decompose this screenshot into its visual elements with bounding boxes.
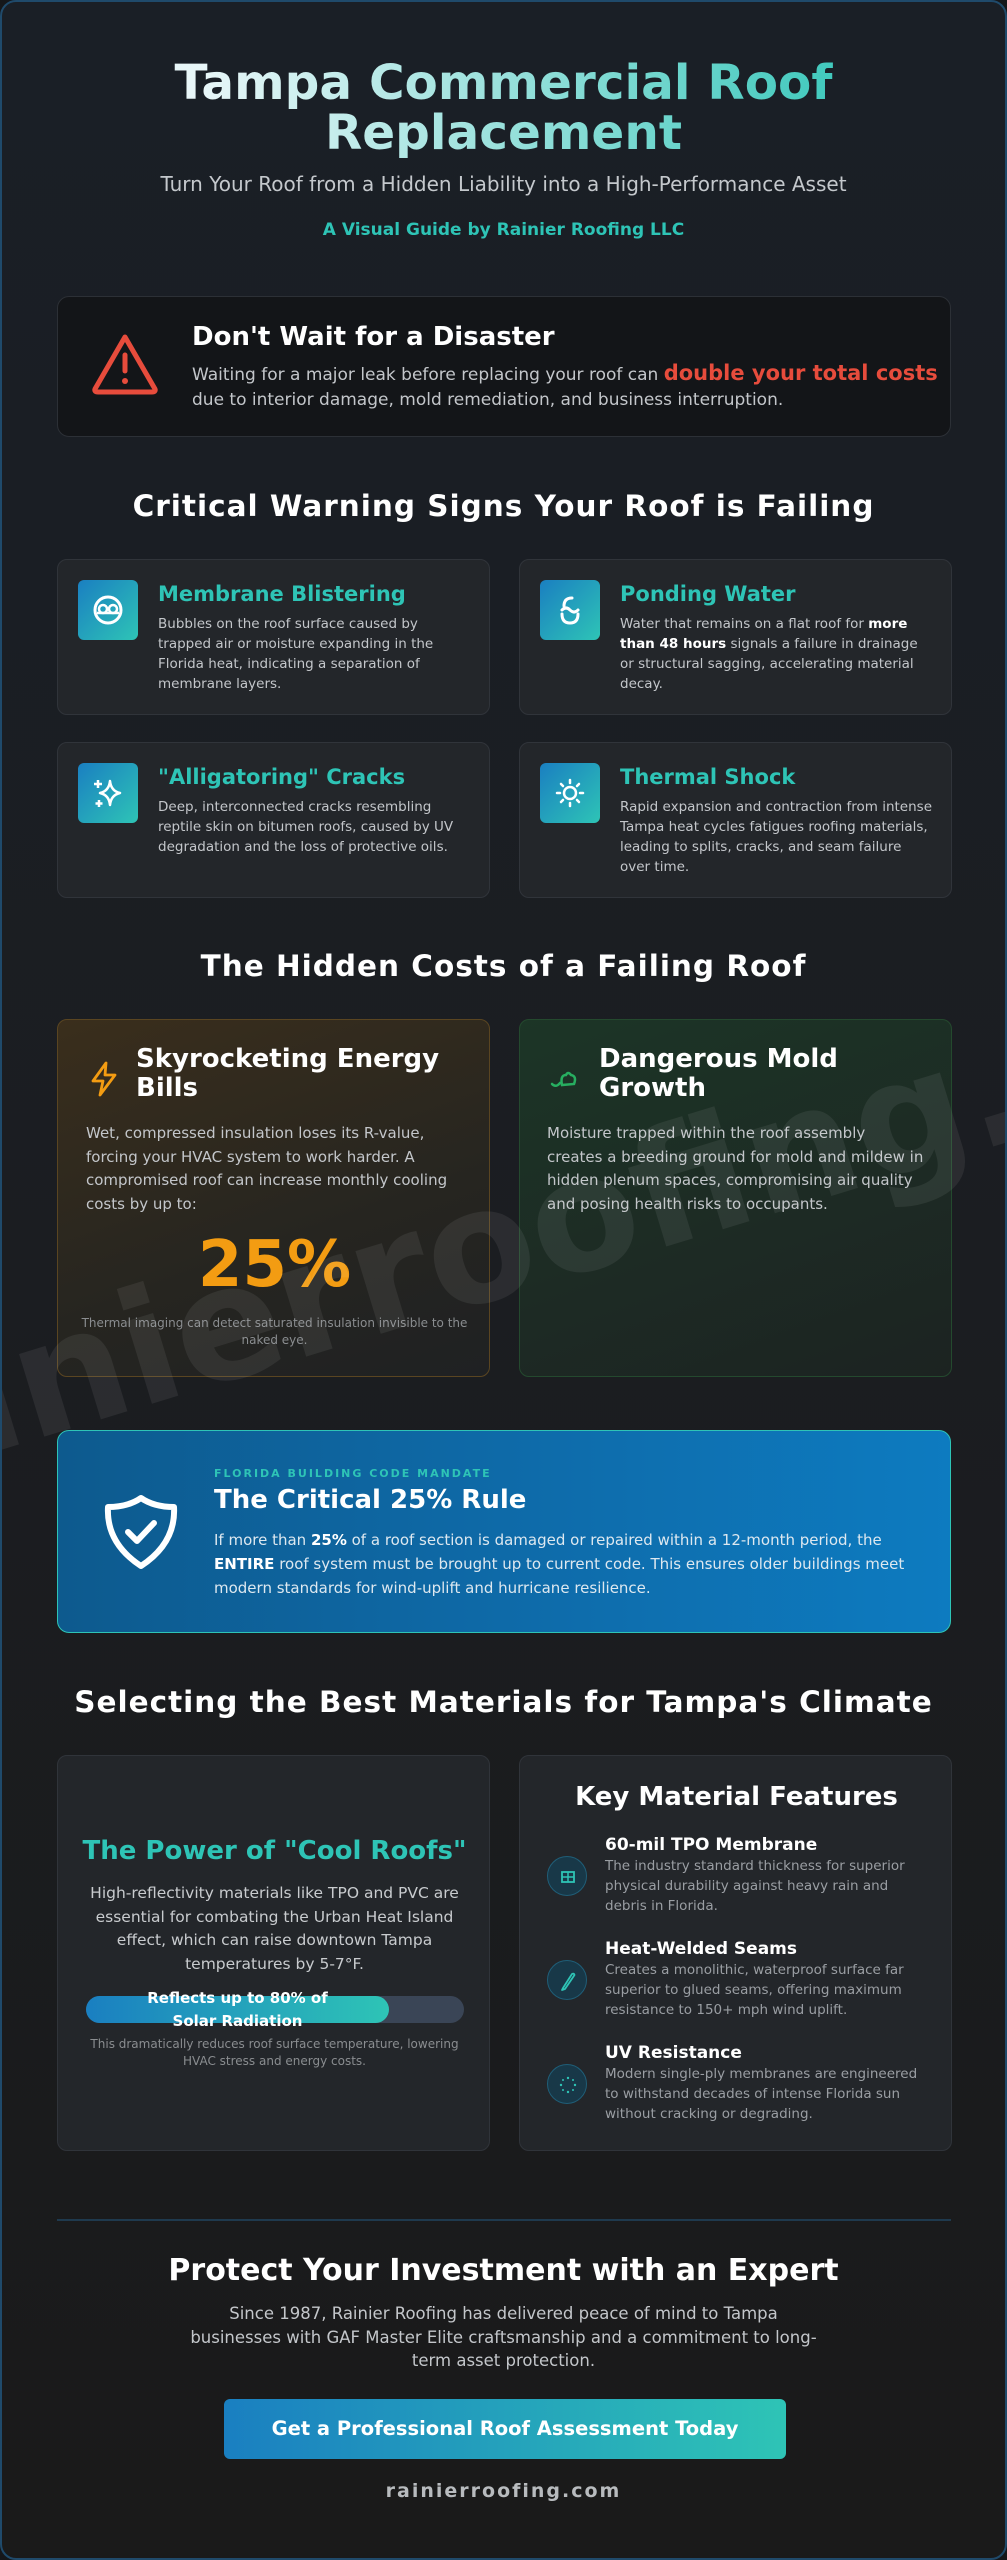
icon: blister: [78, 580, 138, 640]
stat: 25%: 25%: [198, 1228, 351, 1302]
footer text: term asset protection.: [412, 2351, 595, 2370]
byline: A Visual Guide by Rainier Roofing LLC: [323, 220, 684, 240]
card: alligatoring: reptile skin on bitumen roofs, caused by UV: [158, 819, 453, 835]
card: alligatoring: [57, 742, 490, 898]
heading: hidden costs: The Hidden Costs of a Failing Roof: [201, 949, 806, 983]
title: Tampa Commercial Roof: [175, 55, 832, 111]
panel: energy bills: Wet, compressed insulation loses its R-value,: [86, 1124, 424, 1142]
panel: cool roofs: The Power of "Cool Roofs": [82, 1836, 466, 1866]
card: membrane blistering: membrane layers.: [158, 676, 281, 692]
panel: energy bills: [57, 1019, 490, 1377]
panel: energy bills: naked eye.: [242, 1333, 307, 1347]
callout: 25% rule: modern standards for wind-uplift and hurricane resilience.: [214, 1579, 651, 1597]
panel: mold growth: Moisture trapped within the roof assembly: [547, 1124, 865, 1142]
panel: cool roofs: [57, 1755, 490, 2151]
alert heading: Don't Wait for a Disaster: [192, 322, 555, 352]
card: membrane blistering: Florida heat, indicating a separation of: [158, 656, 420, 672]
icon: shield: [104, 1495, 178, 1569]
panel: energy bills: compromised roof can increase monthly cooling: [86, 1171, 447, 1189]
panel: cool roofs: This dramatically reduces roof surface temperature, lowering: [90, 2037, 459, 2051]
panel: cool roofs: essential for combating the Urban Heat Island: [96, 1908, 453, 1926]
card: ponding water: decay.: [620, 676, 663, 692]
panel: mold growth: hidden plenum spaces, compromising air quality: [547, 1171, 913, 1189]
panel: energy bills: Skyrocketing Energy: [136, 1044, 439, 1074]
heading: warning signs: Critical Warning Signs Your Roof is Failing: [133, 489, 874, 523]
panel: energy bills: Thermal imaging can detect saturated insulation invisible to the: [82, 1316, 467, 1330]
feature: UV: to withstand decades of intense Florida sun: [605, 2086, 900, 2102]
feature: TPO: 60-mil TPO Membrane: [605, 1835, 817, 1855]
card: membrane blistering: [57, 559, 490, 715]
alert text: [192, 361, 938, 410]
card: ponding water: than 48 hours signals a failure in drainage: [620, 636, 918, 652]
feature: TPO: physical durability against heavy rain and: [605, 1878, 888, 1894]
subtitle: Turn Your Roof from a Hidden Liability into a High-Performance Asset: [160, 172, 847, 196]
card: alligatoring: "Alligatoring" Cracks: [158, 765, 405, 789]
footer text: [190, 2304, 817, 2370]
card: thermal shock: Rapid expansion and contraction from intense: [620, 799, 932, 815]
footer text: businesses with GAF Master Elite craftsmanship and a commitment to long-: [190, 2328, 817, 2346]
feature: TPO: debris in Florida.: [605, 1898, 718, 1914]
card: thermal shock: [519, 742, 952, 898]
panel: energy bills: forcing your HVAC system to work harder. A: [86, 1148, 415, 1166]
icon: sun: [540, 763, 600, 823]
feature: seams: [547, 1939, 904, 2018]
panel: mold growth: [519, 1019, 952, 1377]
panel: mold growth: Growth: [599, 1073, 706, 1103]
icon: lightning: [92, 1062, 116, 1096]
alert text: due to interior damage, mold remediation, and business interruption.: [192, 390, 783, 410]
feature: UV: without cracking or degrading.: [605, 2106, 813, 2122]
panel: cool roofs: High-reflectivity materials like TPO and PVC are: [90, 1884, 459, 1902]
icon: mold: [550, 1072, 576, 1087]
icon: sun dots: [547, 2064, 587, 2104]
footer heading: Protect Your Investment with an Expert: [168, 2253, 839, 2288]
alert panel: [57, 296, 951, 437]
card: ponding water: Ponding Water: [620, 582, 796, 606]
card: ponding water: Water that remains on a flat roof for more: [620, 616, 907, 632]
icon: membrane: [547, 1856, 587, 1896]
panel: cool roofs: effect, which can raise downtown Tampa: [117, 1931, 432, 1949]
card: thermal shock: leading to splits, cracks, and seam failure: [620, 839, 901, 855]
card: thermal shock: Tampa heat cycles fatigues roofing materials,: [620, 819, 928, 835]
heading: materials: Selecting the Best Materials for Tampa's Climate: [74, 1685, 933, 1719]
footer url: rainierroofing.com: [386, 2480, 621, 2502]
button: CTA: Get a Professional Roof Assessment Today: [272, 2417, 738, 2440]
feature: seams: Heat-Welded Seams: [605, 1939, 797, 1959]
callout: 25% rule: FLORIDA BUILDING CODE MANDATE: [214, 1467, 492, 1480]
footer text: Since 1987, Rainier Roofing has delivered peace of mind to Tampa: [229, 2304, 778, 2323]
panel: mold growth: creates a breeding ground for mold and mildew in: [547, 1148, 923, 1166]
feature: seams: superior to glued seams, offering maximum: [605, 1982, 902, 1998]
panel: mold growth: and posing health risks to occupants.: [547, 1194, 828, 1212]
icon: pen: [547, 1960, 587, 2000]
feature: TPO: [547, 1835, 905, 1914]
feature: UV: Modern single-ply membranes are engineered: [605, 2066, 917, 2082]
icon: water: [540, 580, 600, 640]
panel: mold growth: Dangerous Mold: [599, 1044, 838, 1074]
panel: key material features: Key Material Features: [575, 1782, 898, 1812]
alert text: Waiting for a major leak before replacing your roof can double your total costs: [192, 361, 938, 385]
card: alligatoring: degradation and the loss of protective oils.: [158, 839, 448, 855]
feature: seams: Creates a monolithic, waterproof surface far: [605, 1962, 904, 1978]
callout: 25% rule: [57, 1430, 951, 1633]
button: CTA: [224, 2399, 786, 2459]
feature: TPO: The industry standard thickness for superior: [605, 1858, 905, 1874]
card: ponding water: [519, 559, 952, 715]
card: thermal shock: Thermal Shock: [620, 765, 795, 789]
title: [2, 58, 1005, 158]
panel: key material features: [519, 1755, 952, 2151]
card: ponding water: or structural sagging, accelerating material: [620, 656, 914, 672]
title: Replacement: [325, 105, 682, 161]
feature: UV: UV Resistance: [605, 2043, 742, 2063]
progress bar: 80% reflectance: [86, 1996, 464, 2023]
card: membrane blistering: Bubbles on the roof surface caused by: [158, 616, 418, 632]
icon: warning triangle: [92, 334, 158, 394]
progress bar: 80% reflectance: Solar Radiation: [173, 2012, 302, 2030]
panel: cool roofs: HVAC stress and energy costs.: [183, 2054, 366, 2068]
card: alligatoring: Deep, interconnected cracks resembling: [158, 799, 431, 815]
callout: 25% rule: The Critical 25% Rule: [214, 1485, 526, 1515]
panel: energy bills: Bills: [136, 1073, 198, 1103]
callout: 25% rule: ENTIRE roof system must be brought up to current code. This ensures older buildings meet: [214, 1555, 904, 1573]
icon: sparkle: [78, 763, 138, 823]
callout: 25% rule: If more than 25% of a roof section is damaged or repaired within a 12-month period, the: [214, 1531, 882, 1549]
progress bar: 80% reflectance: Reflects up to 80% of: [147, 1989, 328, 2007]
panel: cool roofs: temperatures by 5-7°F.: [185, 1954, 364, 1972]
card: membrane blistering: trapped air or moisture expanding in the: [158, 636, 433, 652]
card: membrane blistering: Membrane Blistering: [158, 582, 406, 606]
panel: energy bills: costs by up to:: [86, 1194, 197, 1212]
feature: UV: [547, 2043, 917, 2122]
feature: seams: resistance to 150+ mph wind uplift.: [605, 2002, 847, 2018]
card: thermal shock: over time.: [620, 859, 689, 875]
